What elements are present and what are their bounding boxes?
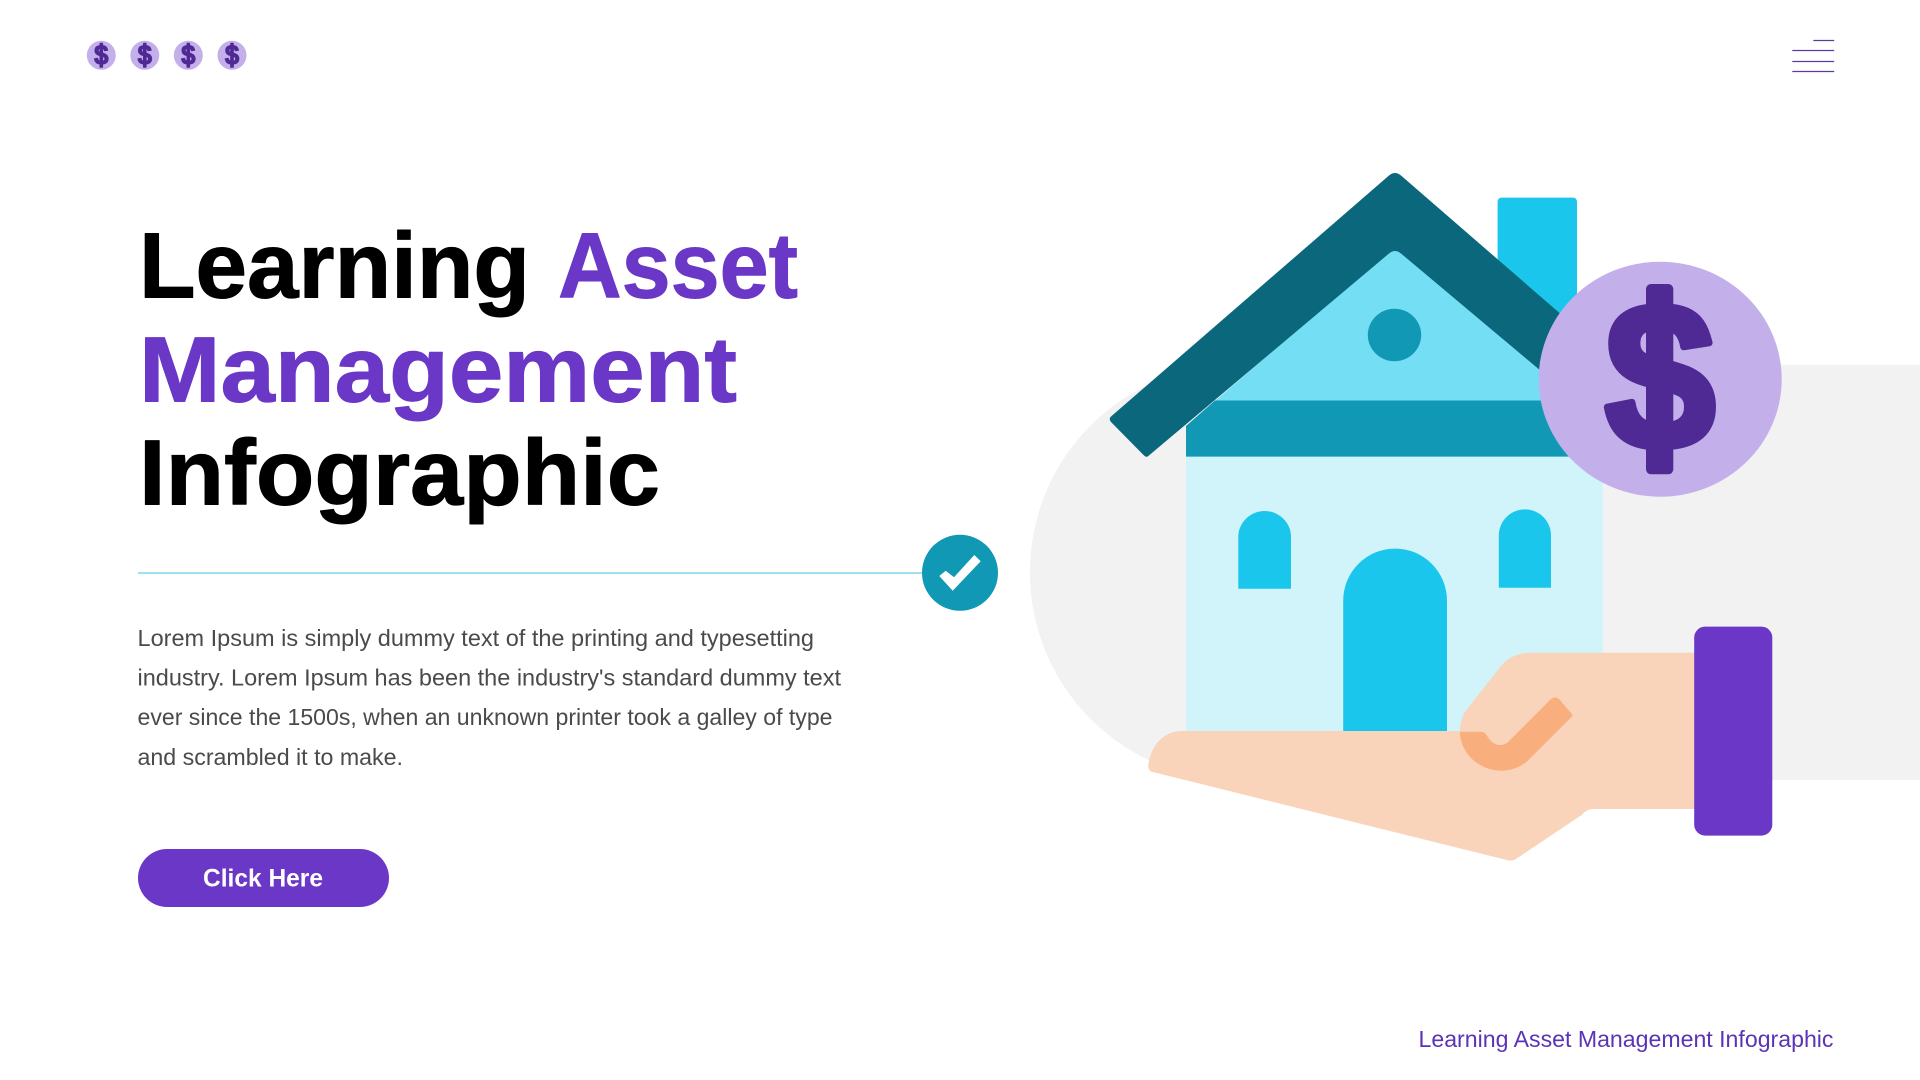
title: Management: [139, 318, 737, 422]
icon: dollar coin 2: [130, 40, 159, 71]
house chimney: [1498, 198, 1577, 328]
sleeve cuff: [1694, 627, 1772, 836]
icon: dollar coin 4: [218, 40, 246, 71]
icon: hamburger menu: [1792, 40, 1834, 72]
hand: [1148, 653, 1695, 861]
house attic: [1215, 245, 1590, 401]
icon: dollar coin 1: $: [94, 40, 109, 71]
background grey pill: [1030, 365, 1920, 780]
house fascia band: [1186, 400, 1640, 457]
finger crease: [1460, 698, 1572, 771]
title: Learning: [139, 214, 530, 318]
house wall: [1186, 456, 1603, 732]
button: click here: [138, 849, 389, 907]
icon: dollar coin 2: $: [138, 40, 152, 71]
title: Infographic: [139, 421, 660, 525]
illustration: hand holding house with dollar coin: [1030, 173, 1920, 861]
house roof: [1110, 173, 1681, 457]
right window: [1499, 509, 1551, 588]
icon row: four dollar coins: [87, 40, 246, 71]
footer label: Learning Asset Management Infographic: [1418, 1026, 1834, 1052]
body text block: Lorem Ipsum is simply dummy text of the printing and typesetting: [138, 625, 814, 651]
body text block: ever since the 1500s, when an unknown printer took a galley of type: [138, 704, 832, 730]
body text block: industry. Lorem Ipsum has been the industry's standard dummy text: [138, 664, 841, 690]
title: [139, 214, 798, 525]
icon: dollar coin 4: $: [225, 40, 239, 71]
title: Asset: [558, 214, 798, 318]
dollar coin: [1539, 260, 1782, 497]
divider with check badge: [138, 535, 998, 611]
icon: dollar coin 3: $: [181, 40, 196, 71]
attic round window: [1368, 309, 1421, 361]
icon: check badge: [922, 535, 998, 611]
icon: dollar coin 3: [174, 40, 203, 71]
door: [1343, 549, 1447, 731]
button: click here: Click Here: [203, 865, 323, 893]
dollar coin: $: [1605, 260, 1715, 494]
body text block: and scrambled it to make.: [138, 744, 403, 770]
body text block: [138, 625, 841, 770]
left window: [1238, 511, 1291, 589]
icon: dollar coin 1: [87, 40, 116, 71]
